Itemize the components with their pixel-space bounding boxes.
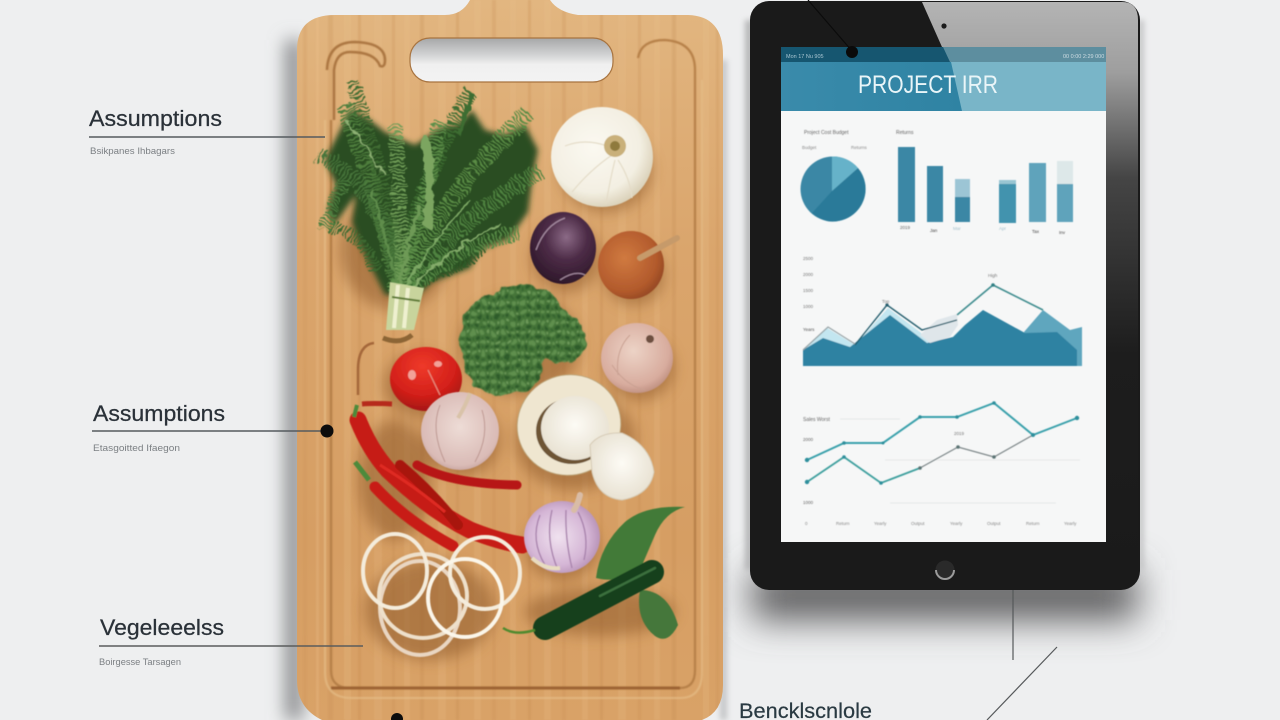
callout: vegetables: Boirgesse Tarsagen (99, 657, 181, 668)
leader lines: tablet bottom (987, 590, 1057, 720)
panel: cutting board (297, 0, 723, 720)
vegetable: purple onion (530, 212, 596, 284)
area chart: 2500 (803, 256, 814, 261)
callout: assumptions top (89, 106, 325, 157)
callout: assumptions top: Assumptions (89, 106, 222, 131)
handle cut-out (410, 38, 613, 82)
pie chart: Returns (851, 145, 868, 150)
status bar (781, 47, 1106, 62)
vegetable shadows (340, 128, 675, 660)
panel: tablet (750, 1, 1140, 590)
vegetable: broccoli (460, 285, 586, 395)
vegetable: lilac onion (524, 495, 600, 573)
area chart: 1500 (803, 288, 814, 293)
line chart: Yearly (1064, 521, 1077, 526)
line chart: Return (1026, 521, 1040, 526)
vegetable: middle onion (421, 392, 499, 470)
title band: PROJECT IRR (858, 71, 998, 99)
bezel glare (922, 2, 1138, 588)
tablet body (750, 1, 1140, 590)
line chart: 2000 (803, 437, 814, 442)
line chart: Output (911, 521, 925, 526)
line chart: 0 (805, 521, 808, 526)
line chart (803, 401, 1080, 526)
line chart: 1000 (803, 500, 814, 505)
vegetable: dill bunch (318, 80, 542, 395)
status bar: Mon 17 Nu 905 (786, 54, 824, 60)
drop shadows (286, 20, 1144, 720)
bar chart: 2019 (900, 225, 911, 230)
status bar: 00 0:00 2:29 000 (1063, 54, 1104, 60)
callout: assumptions top: Bsikpanes Ihbagars (90, 146, 175, 157)
callout dot: board bottom (391, 713, 403, 720)
dill stems (358, 282, 424, 395)
area chart: 2000 (803, 272, 814, 277)
bar chart: Tax (1032, 229, 1040, 234)
line chart: Output (987, 521, 1001, 526)
area chart: High (988, 273, 998, 278)
pie chart: Project Cost Budget (804, 130, 849, 136)
title band (781, 62, 1106, 111)
vegetable: red chillies (354, 404, 522, 546)
callout: assumptions middle: Etasgoitted Ifaegon (93, 443, 180, 454)
vegetable: pink onion (601, 323, 673, 393)
callout: assumptions middle: Assumptions (93, 401, 225, 426)
wood grain (303, 0, 719, 720)
area chart: 1000 (803, 304, 814, 309)
vegetable: mushroom (503, 360, 654, 500)
area chart: Years (803, 327, 815, 332)
callout: vegetables: Vegeleeelss (100, 615, 224, 640)
pie chart (800, 130, 868, 222)
area chart (803, 256, 1082, 366)
bar chart: Inv (1059, 230, 1066, 235)
vegetable: leaves and cucumber (503, 507, 685, 639)
vegetable: tomato (390, 347, 462, 411)
screen (781, 47, 1106, 542)
line chart: Yearly (950, 521, 963, 526)
bar chart: Mar (953, 226, 961, 231)
juice groove (325, 40, 702, 698)
callout: assumptions middle (92, 401, 334, 454)
leader line: tablet top (808, 0, 858, 58)
bar chart (896, 130, 1073, 235)
bar chart: Apr (999, 226, 1007, 231)
line chart: Sales Worst (803, 417, 830, 423)
board body (297, 0, 723, 720)
bar chart: Jan (930, 228, 938, 233)
home button (936, 560, 954, 580)
callout: vegetables (99, 615, 363, 668)
bar chart: Returns (896, 130, 914, 136)
line chart: 2019 (954, 431, 965, 436)
camera (941, 23, 947, 29)
vegetable: onion rings (363, 534, 520, 655)
pie chart: Budget (802, 145, 817, 150)
line chart: Return (836, 521, 850, 526)
vegetable: white onion (551, 107, 653, 207)
line chart: Yearly (874, 521, 887, 526)
area chart: Top (882, 299, 890, 304)
vegetable: brown onion (598, 231, 677, 299)
